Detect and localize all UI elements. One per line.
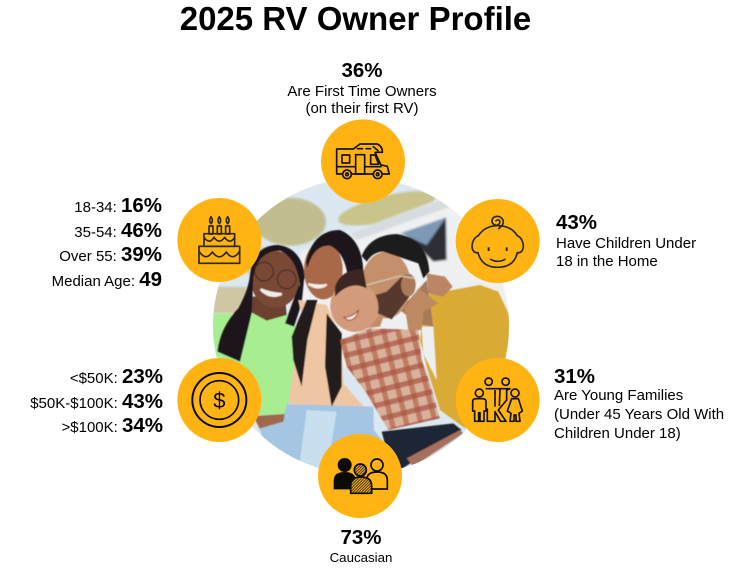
stat: caucasian xyxy=(330,526,392,565)
stat: young families: (Under 45 Years Old With xyxy=(554,406,724,423)
title: 2025 RV Owner Profile xyxy=(180,0,531,37)
photo: people xyxy=(213,230,510,473)
stat: children under 18 xyxy=(556,211,696,270)
icon badge: three people demographic xyxy=(318,434,402,518)
icon badge: income dollar coin xyxy=(177,358,261,442)
icon badge: birthday cake age xyxy=(177,198,261,282)
stat: young families xyxy=(554,365,724,442)
stat: children under 18: 18 in the Home xyxy=(556,253,658,270)
stat: caucasian: 73% xyxy=(340,526,382,549)
icon badge: income dollar coin: $ xyxy=(213,388,225,413)
icon badge: baby face xyxy=(456,199,540,283)
photo background xyxy=(213,182,508,468)
stat: children under 18: Have Children Under xyxy=(556,235,696,252)
man xyxy=(420,285,510,428)
stat: household income: >$100K: 34% xyxy=(62,414,163,437)
stat: children under 18: 43% xyxy=(556,211,597,234)
stat: household income: <$50K: 23% xyxy=(70,365,163,388)
stat: household income xyxy=(30,365,163,437)
stat: age breakdown: Over 55: 39% xyxy=(59,243,162,266)
stat: age breakdown xyxy=(52,194,162,290)
stat: household income: $50K-$100K: 43% xyxy=(30,390,163,412)
icon badge: first RV camper xyxy=(321,119,405,203)
stat: first time owners: (on their first RV) xyxy=(305,100,419,117)
stat: young families: 31% xyxy=(554,365,595,388)
icon badge: young family xyxy=(456,358,540,442)
stat: first time owners: 36% xyxy=(341,59,383,82)
stat: young families: Children Under 18) xyxy=(554,425,681,442)
stat: first time owners: Are First Time Owners xyxy=(287,83,437,100)
child xyxy=(340,328,440,430)
stat: age breakdown: 18-34: 16% xyxy=(74,194,162,217)
stat: age breakdown: 35-54: 46% xyxy=(74,218,162,242)
stat: caucasian: Caucasian xyxy=(330,550,392,565)
stat: young families: Are Young Families xyxy=(554,387,683,404)
circular family photo with icon badges xyxy=(177,119,540,518)
photo: family in front of RV xyxy=(213,182,509,468)
left girl xyxy=(213,312,297,415)
middle woman xyxy=(288,300,367,410)
stat: age breakdown: Median Age: 49 xyxy=(52,268,162,290)
stat: first time owners xyxy=(287,59,437,117)
